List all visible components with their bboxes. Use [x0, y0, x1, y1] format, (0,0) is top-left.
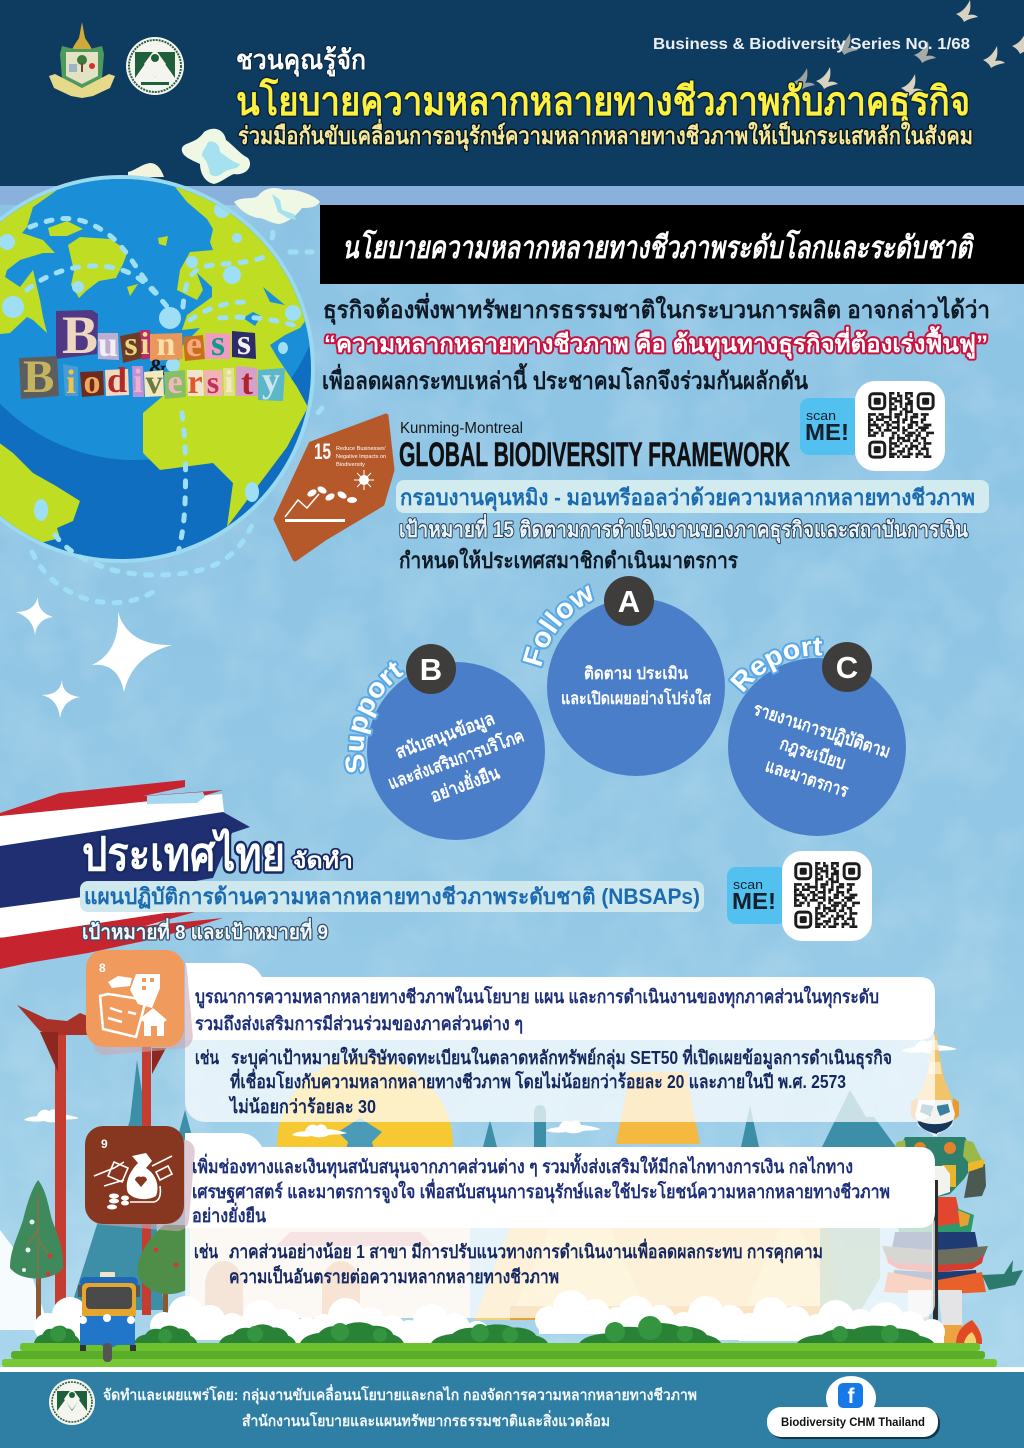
icon: target 8 tile — [86, 950, 194, 1056]
footer credits: จัดทำและเผยแพร่โดย: กลุ่มงานขับเคลื่อนนโยบายและกลไก กองจัดการความหลากหลายทางชีวภาพ — [103, 1384, 697, 1405]
word: Biodiversity: s — [207, 364, 219, 400]
framework heading — [399, 420, 790, 474]
scenery: clouds and bushes — [34, 1290, 945, 1348]
logo: ministry crest — [49, 22, 115, 98]
logo: footer seal — [49, 1379, 95, 1425]
intro paragraph — [322, 292, 990, 395]
panel: support B: B — [420, 652, 442, 687]
word: Biodiversity: d — [107, 360, 127, 400]
text: target 8: ที่เชื่อมโยงกับความหลากหลายทางชีวภาพ โดยไม่น้อยกว่าร้อยละ 20 และภายในปี พ.ศ. 2573 — [230, 1068, 846, 1092]
footer credits — [103, 1384, 697, 1430]
facebook badge — [767, 1376, 940, 1439]
card 9: translucent example card and white top — [185, 1133, 935, 1318]
word: Business — [56, 305, 256, 365]
word: Biodiversity: v — [146, 364, 162, 401]
intro paragraph: เพื่อลดผลกระทบเหล่านี้ ประชาคมโลกจึงร่วมกันผลักดัน — [322, 362, 809, 395]
qr code: nbsaps — [727, 851, 872, 941]
panel: report C: C — [836, 650, 858, 685]
word: Business: s — [124, 326, 138, 363]
text: target 8: รวมถึงส่งเสริมการมีส่วนร่วมของภาคส่วนต่าง ๆ — [195, 1013, 523, 1034]
qr code: nbsaps: ME! — [732, 888, 776, 914]
word: Business: e — [186, 324, 202, 364]
footer band — [0, 1367, 1024, 1448]
scenery: giant guardian statue — [882, 1030, 1023, 1344]
framework heading: GLOBAL BIODIVERSITY FRAMEWORK — [399, 436, 790, 474]
outer dashed routes — [32, 224, 322, 603]
text: target 8 — [195, 985, 892, 1117]
thai flag brushstroke — [0, 780, 250, 969]
facebook badge: f — [848, 1385, 856, 1408]
word: Business: n — [157, 326, 176, 363]
text: target 8: บูรณาการความหลากหลายทางชีวภาพในนโยบาย แผน และการดำเนินงานของทุกภาคส่วนในทุกระดับ — [195, 985, 879, 1009]
word: Biodiversity: r — [187, 364, 203, 401]
word: Biodiversity: y — [262, 360, 280, 400]
black banner — [320, 205, 1024, 284]
icon: target 8 tile: 8 — [99, 961, 106, 975]
nbsaps bar: แผนปฏิบัติการด้านความหลากหลายทางชีวภาพระดับชาติ (NBSAPs) — [84, 884, 700, 909]
text: target 9: เพิ่มช่องทางและเงินทุนสนับสนุนจากภาคส่วนต่าง ๆ รวมทั้งส่งเสริมให้มีกลไกทางการเงิน กลไกทาง — [192, 1153, 853, 1179]
word: Biodiversity: i — [66, 364, 76, 401]
framework heading: Kunming-Montreal — [400, 420, 523, 437]
business and biodiversity collage title: & — [148, 355, 168, 380]
icon: SDG target 15 tile: Biodiversity — [336, 462, 365, 468]
panel: support B: Support — [343, 660, 406, 774]
icon: target 9 tile: 9 — [101, 1137, 108, 1151]
card 8: translucent example card and white top — [185, 963, 935, 1122]
text: target 8: เช่น — [195, 1047, 219, 1068]
target 15 text — [399, 513, 968, 573]
icon: SDG target 15 tile — [276, 416, 392, 559]
scenery: red giant swing — [17, 1005, 166, 1315]
panel: support B: และส่งเสริมการบริโภค — [385, 725, 527, 793]
panel: report C: รายงานการปฏิบัติตาม — [751, 699, 893, 762]
heading: Thailand: ประเทศไทย — [82, 828, 285, 880]
flight dashed routes — [27, 219, 302, 575]
continents — [0, 186, 308, 542]
icon: SDG target 15 tile: Negative Impacts on — [336, 454, 386, 460]
text: target 9 — [192, 1153, 890, 1287]
logo: agency round seal — [126, 37, 184, 95]
qr code: framework: scan — [806, 408, 836, 423]
globe — [0, 175, 324, 606]
icon: SDG target 15 tile: Reduce Businesses' — [336, 446, 386, 452]
word: Biodiversity: t — [241, 362, 253, 402]
word: Business: s — [237, 322, 251, 362]
word: Biodiversity — [19, 351, 285, 403]
icon: target 9 tile — [85, 1126, 196, 1232]
text: target 9: เช่น — [194, 1241, 218, 1262]
word: Biodiversity: e — [167, 364, 183, 401]
framework subtitle bar: กรอบงานคุนหมิง - มอนทรีออลว่าด้วยความหลากหลายทางชีวภาพ — [400, 485, 975, 512]
panel: follow A: A — [618, 584, 640, 619]
text: target 8: ไม่น้อยกว่าร้อยละ 30 — [228, 1095, 376, 1117]
text: target 8: ระบุค่าเป้าหมายให้บริษัทจดทะเบียนในตลาดหลักทรัพย์กลุ่ม SET50 ที่เปิดเผยข้อมูลการดำเนินธุรกิจ — [231, 1044, 892, 1070]
word: Biodiversity: B — [23, 351, 54, 403]
decorative clouds near globe — [128, 129, 320, 224]
word: Biodiversity: i — [225, 363, 234, 399]
qr code: framework — [800, 381, 945, 471]
clouds in sky — [24, 1040, 957, 1137]
scenery: temples and sky — [24, 1040, 957, 1320]
text: target 9: เศรษฐศาสตร์ และมาตรการจูงใจ เพื่อสนับสนุนการอนุรักษ์และใช้ประโยชน์ความหลากหลายทางชีวภาพ — [192, 1178, 890, 1204]
intro paragraph: ธุรกิจต้องพึ่งพาทรัพยากรธรรมชาติในกระบวนการผลิต อาจกล่าวได้ว่า — [323, 292, 990, 326]
text: target 9: อย่างยั่งยืน — [192, 1202, 266, 1226]
word: Business: u — [98, 324, 118, 364]
scenery: trees — [10, 1180, 186, 1320]
business and biodiversity collage title — [19, 305, 285, 403]
word: Business: i — [141, 325, 150, 361]
series label: Business & Biodiversity Series No. 1/68 — [653, 36, 970, 53]
light dots — [0, 202, 301, 521]
heading: Thailand: จัดทำ — [292, 848, 353, 873]
panel: report C: Report — [728, 636, 824, 694]
panel: follow A: ติดตาม ประเมิน — [584, 664, 688, 683]
word: Biodiversity: o — [84, 364, 100, 401]
icon: tuk tuk — [78, 1272, 140, 1362]
target 15 text: กำหนดให้ประเทศสมาชิกดำเนินมาตรการ — [399, 547, 738, 573]
word: Business: B — [62, 305, 98, 365]
footer credits: สำนักงานนโยบายและแผนทรัพยากรธรรมชาติและสิ่งแวดล้อม — [242, 1410, 610, 1430]
panel: follow A — [520, 576, 725, 776]
panel: support B: อย่างยั่งยืน — [427, 760, 503, 806]
targets 8 and 9 label: เป้าหมายที่ 8 และเป้าหมายที่ 9 — [82, 917, 328, 944]
birds flying — [793, 0, 1024, 96]
icon: SDG target 15 tile: 15 — [314, 439, 331, 464]
scenery: grass stripes — [2, 1343, 997, 1367]
panel: follow A: และเปิดเผยอย่างโปร่งใส — [561, 688, 712, 708]
header band — [0, 0, 1024, 205]
icon: sparkles — [16, 597, 172, 718]
qr code: framework: ME! — [805, 419, 849, 445]
panel: report C — [728, 636, 906, 836]
panel: report C: กฎระเบียบ — [777, 733, 848, 773]
highlighted quote: “ความหลากหลายทางชีวภาพ คือ ต้นทุนทางธุรกิจที่ต้องเร่งฟื้นฟู” — [324, 325, 988, 360]
panel: support B — [343, 644, 545, 840]
panel: report C: และมาตรการ — [763, 755, 851, 801]
text: target 9: ภาคส่วนอย่างน้อย 1 สาขา มีการปรับแนวทางการดำเนินงานเพื่อลดผลกระทบ การคุกคาม — [229, 1238, 823, 1264]
scenery: left white mound cloud — [0, 1230, 50, 1330]
text: target 9: ความเป็นอันตรายต่อความหลากหลายทางชีวภาพ — [229, 1264, 559, 1287]
qr code: nbsaps: scan — [733, 877, 763, 892]
facebook badge: Biodiversity CHM Thailand — [781, 1417, 925, 1429]
header intro text: ชวนคุณรู้จัก — [236, 45, 366, 77]
panel: support B: สนับสนุนข้อมูล — [393, 708, 498, 764]
panel: follow A: Follow — [520, 583, 594, 668]
word: Business: s — [211, 323, 225, 363]
word: Biodiversity: i — [133, 363, 143, 400]
